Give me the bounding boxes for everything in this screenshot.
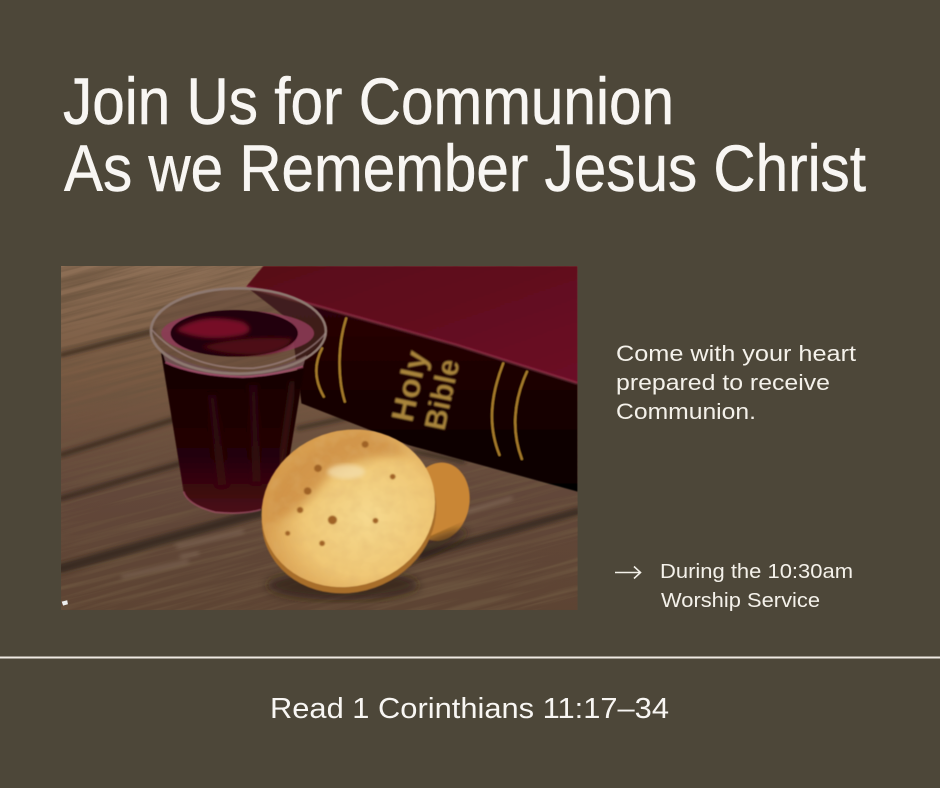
service time [660,561,853,612]
bible [246,266,578,492]
title: Join Us for Communion [63,64,674,138]
wood table [61,266,578,610]
communion bread [260,428,470,603]
bible lettering: Bible [418,356,467,433]
footer scripture reference: Read 1 Corinthians 11:17–34 [270,693,669,725]
service time: Worship Service [661,590,820,612]
icon: arrow [615,566,640,578]
cup of juice [151,288,326,513]
bible lettering: Holy [384,347,435,425]
photo: communion cup, bread and bible [61,266,578,610]
title [63,64,866,205]
body text: Come with your heart [616,341,856,366]
bible lettering [390,349,460,432]
body text: prepared to receive [616,370,830,395]
body text [616,341,856,424]
divider line [0,656,940,658]
body text: Communion. [616,399,756,424]
service time: During the 10:30am [660,561,853,583]
